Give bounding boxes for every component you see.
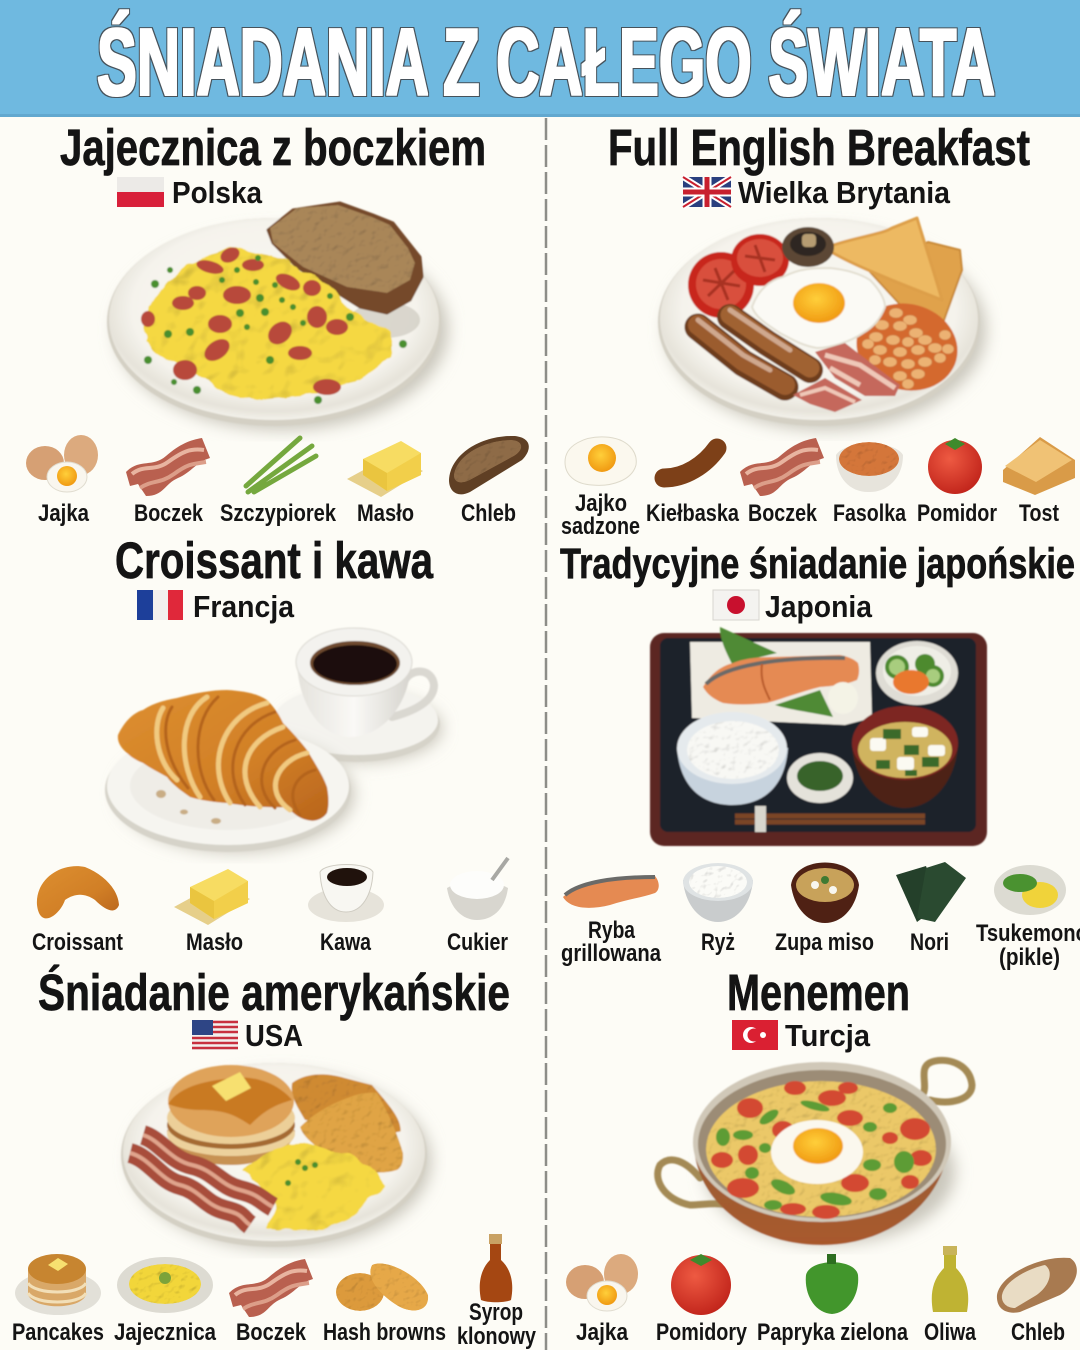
ingredient labels: Szczypiorek <box>220 500 336 527</box>
ingredient labels: (pikle) <box>999 944 1060 971</box>
dish: croissant and coffee <box>105 628 442 852</box>
panel: Japonia <box>560 540 1080 971</box>
ingredient labels: Boczek <box>236 1319 306 1346</box>
dish: japanese breakfast tray <box>650 627 987 846</box>
ingredient labels: Chleb <box>461 500 516 527</box>
ingredient labels: Boczek <box>748 500 817 527</box>
ingredient labels: grillowana <box>561 940 661 967</box>
ingredient labels <box>561 490 1059 540</box>
ingredient labels: Cukier <box>447 929 508 956</box>
ingredient labels: Oliwa <box>924 1319 976 1346</box>
ingredient icons <box>566 1246 1077 1315</box>
ingredient labels: Syrop <box>469 1299 523 1326</box>
heading: Croissant i kawa: Croissant i kawa <box>115 532 433 589</box>
ingredient labels: Pancakes <box>12 1319 104 1346</box>
dish: full english breakfast <box>658 218 986 430</box>
ingredient labels: Croissant <box>32 929 123 956</box>
ingredient labels: Masło <box>357 500 414 527</box>
ingredient labels: Pomidory <box>656 1319 747 1346</box>
ingredient icons <box>37 858 508 925</box>
dish: menemen pan <box>658 1060 972 1245</box>
country: USA: USA <box>245 1018 303 1053</box>
ingredient labels: Ryż <box>701 929 735 956</box>
ingredient icons <box>26 435 529 497</box>
ingredient labels: Masło <box>186 929 243 956</box>
flag: Wielka Brytania <box>683 177 731 207</box>
country: Turcja: Turcja <box>785 1018 871 1053</box>
panel: USA <box>12 964 536 1350</box>
ingredient icons <box>15 1234 512 1317</box>
ingredient labels: Chleb <box>1011 1319 1065 1346</box>
dish: scrambled eggs with bacon <box>107 203 448 430</box>
flag: Francja <box>137 590 183 620</box>
ingredient labels: klonowy <box>457 1323 536 1350</box>
ingredient icons <box>565 437 1075 496</box>
ingredient icons <box>563 862 1066 923</box>
flag: Japonia <box>713 590 759 620</box>
ingredient labels: Jajecznica <box>114 1319 216 1346</box>
ingredient labels: Papryka zielona <box>757 1319 908 1346</box>
ingredient labels: Jajko <box>575 490 627 517</box>
ingredient labels: Fasolka <box>833 500 906 527</box>
ingredient labels <box>561 917 1080 971</box>
heading: Jajecznica z boczkiem: Jajecznica z boczkiem <box>60 119 486 176</box>
ingredient labels <box>38 500 516 527</box>
ingredient labels: Hash browns <box>323 1319 446 1346</box>
ingredient labels: Kiełbaska <box>646 500 739 527</box>
dish: american breakfast <box>121 1063 431 1249</box>
ingredient labels: Jajka <box>576 1319 628 1346</box>
ingredient labels: Boczek <box>134 500 203 527</box>
ingredient labels: sadzone <box>561 513 640 540</box>
panel: Polska <box>26 119 529 527</box>
ingredient labels: Tost <box>1019 500 1059 527</box>
heading: Śniadanie amerykańskie: Śniadanie amerykańskie <box>38 964 510 1021</box>
country: Wielka Brytania: Wielka Brytania <box>738 175 951 210</box>
ingredient labels <box>12 1299 536 1350</box>
flag: USA <box>192 1020 238 1050</box>
ingredient labels: Ryba <box>588 917 635 944</box>
country: Polska: Polska <box>172 175 263 210</box>
ingredient labels <box>32 929 508 956</box>
flag: Polska <box>117 177 164 207</box>
ingredient labels: Kawa <box>320 929 371 956</box>
heading: Menemen: Menemen <box>727 964 910 1021</box>
country: Japonia: Japonia <box>765 589 873 624</box>
panel: Francja <box>32 532 508 956</box>
ingredient labels: Pomidor <box>917 500 997 527</box>
flag: Turcja <box>732 1020 778 1050</box>
country: Francja: Francja <box>193 589 295 624</box>
ingredient labels: Zupa miso <box>775 929 874 956</box>
ingredient labels <box>576 1319 1065 1346</box>
ingredient labels: Jajka <box>38 500 89 527</box>
ingredient labels: Nori <box>910 929 949 956</box>
panel: Wielka Brytania <box>561 119 1075 540</box>
panel: Turcja <box>566 964 1077 1346</box>
